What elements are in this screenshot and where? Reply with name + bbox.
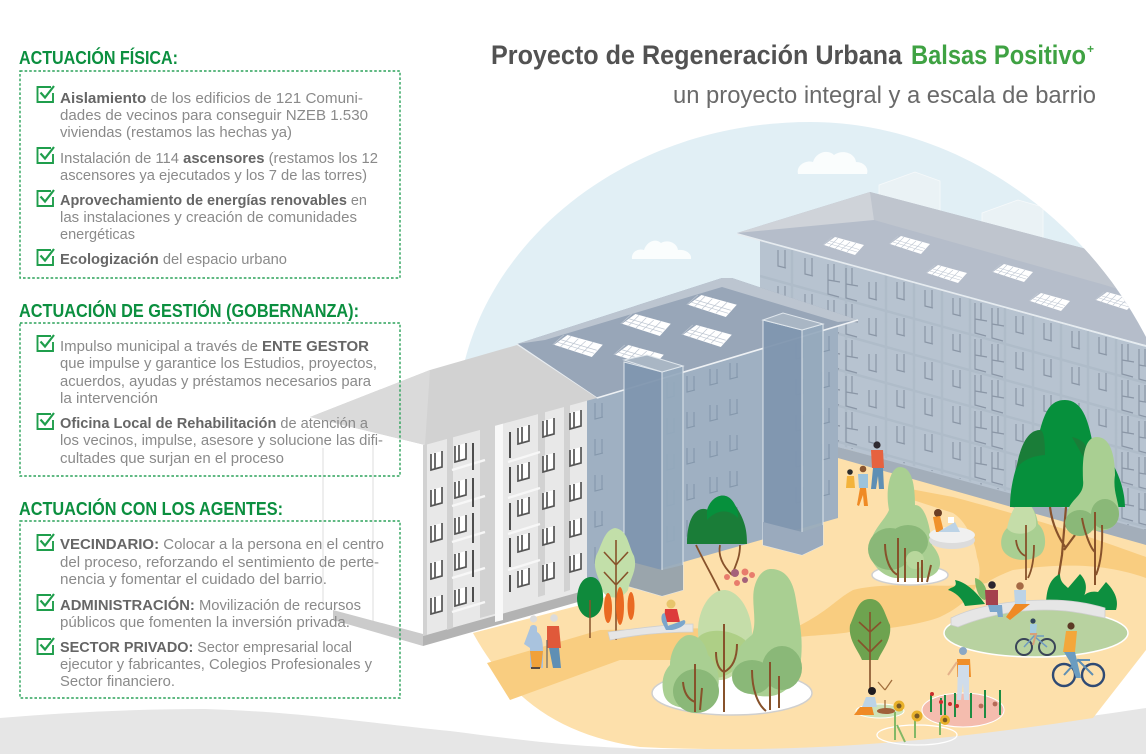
tree group: large pit <box>663 569 802 713</box>
tree: small dark <box>577 577 603 638</box>
middle building <box>517 278 858 596</box>
flowers: pink <box>724 568 755 586</box>
title: + <box>1087 42 1094 56</box>
front building: balconies <box>452 452 540 612</box>
text: gestión list: cultades que surjan en el proceso <box>60 451 284 467</box>
middle building: facade <box>585 322 838 590</box>
garden bed: sunflowers <box>877 700 957 745</box>
bench: left <box>608 624 693 640</box>
text: actuación física list: Aislamiento de los edificios de 121 Comuni- <box>60 91 363 107</box>
front white building <box>310 345 597 646</box>
back building <box>737 172 1146 562</box>
tree: small light right <box>1001 502 1045 580</box>
lift tower 2 <box>763 313 823 555</box>
text: actuación física list: dades de vecinos para conseguir NZEB 1.530 <box>60 108 368 124</box>
text: actuación física list: viviendas (restamos las hechas ya) <box>60 125 292 141</box>
person: adult on bicycle <box>1053 622 1104 686</box>
panel: actuación física <box>19 47 400 278</box>
panel: actuación de gestión <box>19 300 400 476</box>
text: gestión list <box>60 339 383 467</box>
text: gestión list: Impulso municipal a través de ENTE GESTOR <box>60 339 370 355</box>
text: agentes list: nencia y fomentar el cuidado del barrio. <box>60 572 327 588</box>
text: actuación física list: energéticas <box>60 227 135 243</box>
front building: side wall <box>323 445 425 640</box>
person: sitting reading on round seat <box>933 509 972 532</box>
garden bed: vegetables <box>922 690 1004 727</box>
person: reading on bench <box>661 600 685 630</box>
person: child on bicycle <box>1016 618 1055 655</box>
heading: actuación con los agentes: ACTUACIÓN CON LOS AGENTES: <box>19 498 283 519</box>
lawn <box>944 609 1128 657</box>
front building: facade <box>423 398 587 636</box>
sand ground <box>473 440 1146 749</box>
people: seated on bench <box>985 581 1030 620</box>
heading: actuación de gestión: ACTUACIÓN DE GESTIÓN (GOBERNANZA): <box>19 300 359 321</box>
text: actuación física list: Ecologización del espacio urbano <box>60 252 287 268</box>
text: actuación física list <box>60 91 378 268</box>
sky circle <box>465 122 1146 560</box>
text: agentes list: SECTOR PRIVADO: Sector empresarial local <box>60 640 352 656</box>
front building: windows <box>431 410 581 614</box>
person: planting <box>854 680 904 718</box>
person: family <box>846 441 884 506</box>
front building: base <box>333 610 423 646</box>
tree pit: large <box>652 671 812 715</box>
text: actuación física list: Instalación de 114 ascensores (restamos los 12 <box>60 151 378 167</box>
heading: actuación física: ACTUACIÓN FÍSICA: <box>19 47 178 68</box>
back building: chimneys <box>878 172 1044 238</box>
flowers: orange <box>604 587 634 625</box>
text: actuación física list: ascensores ya ejecutados y los 7 de las torres) <box>60 168 367 184</box>
text: agentes list: del proceso, reforzando el sentimiento de perte- <box>60 555 379 571</box>
middle building: windows <box>595 336 830 563</box>
lift tower 1 <box>624 355 683 596</box>
cloud: upper <box>798 152 867 174</box>
text: agentes list: Sector financiero. <box>60 674 175 690</box>
text: gestión list: Oficina Local de Rehabilitación de atención a <box>60 416 369 432</box>
text: actuación física list: las instalaciones y creación de comunidades <box>60 210 357 226</box>
subtitle: un proyecto integral y a escala de barrio <box>673 82 1096 109</box>
text: agentes list <box>60 537 384 690</box>
text: gestión list: acuerdos, ayudas y préstamos necesarios para <box>60 374 372 390</box>
sand: darker paths <box>487 488 1146 700</box>
front building: pilasters <box>423 403 570 636</box>
tree: dark green by tower <box>687 496 747 596</box>
middle building: solar panels <box>553 295 737 367</box>
back building: windows <box>777 250 1146 530</box>
tree: olive mid <box>850 599 890 690</box>
title: Proyecto de Regeneración Urbana <box>491 40 903 70</box>
plants behind bench <box>948 574 1117 610</box>
back building: base <box>838 447 1146 545</box>
text: gestión list: los vecinos, impulse, asesore y solucione las difi- <box>60 433 383 449</box>
text: agentes list: públicos que fomenten la inversión privada. <box>60 615 350 631</box>
cloud: lower <box>632 241 691 259</box>
middle building: roof <box>517 278 858 398</box>
bench: right <box>951 600 1105 627</box>
back building: roof <box>737 192 1146 345</box>
background: bottom grey wave <box>0 708 1146 754</box>
person: gardener <box>948 647 971 700</box>
text: actuación física list: Aprovechamiento de energías renovables en <box>60 193 367 209</box>
panel: actuación con los agentes <box>19 498 400 698</box>
tree pit: middle <box>872 565 948 585</box>
text: agentes list: VECINDARIO: Colocar a la persona en el centro <box>60 537 384 553</box>
text: gestión list: que impulse y garantice los Estudios, proyectos, <box>60 356 377 372</box>
tree group: middle pit <box>868 467 940 582</box>
front building: roof <box>310 345 597 445</box>
tree: big dark green right <box>1010 400 1125 580</box>
text: agentes list: ejecutor y fabricantes, Colegios Profesionales y <box>60 657 373 673</box>
title: Balsas Positivo <box>911 40 1086 70</box>
tree: light right <box>1065 437 1119 585</box>
back building: solar panels <box>823 236 1136 311</box>
text: gestión list: la intervención <box>60 391 158 407</box>
person: elderly couple <box>524 614 561 668</box>
tree: light sapling by tower <box>595 528 635 640</box>
seat: round <box>929 527 975 549</box>
back building: facade <box>760 240 1146 532</box>
text: agentes list: ADMINISTRACIÓN: Movilización de recursos <box>60 596 361 614</box>
